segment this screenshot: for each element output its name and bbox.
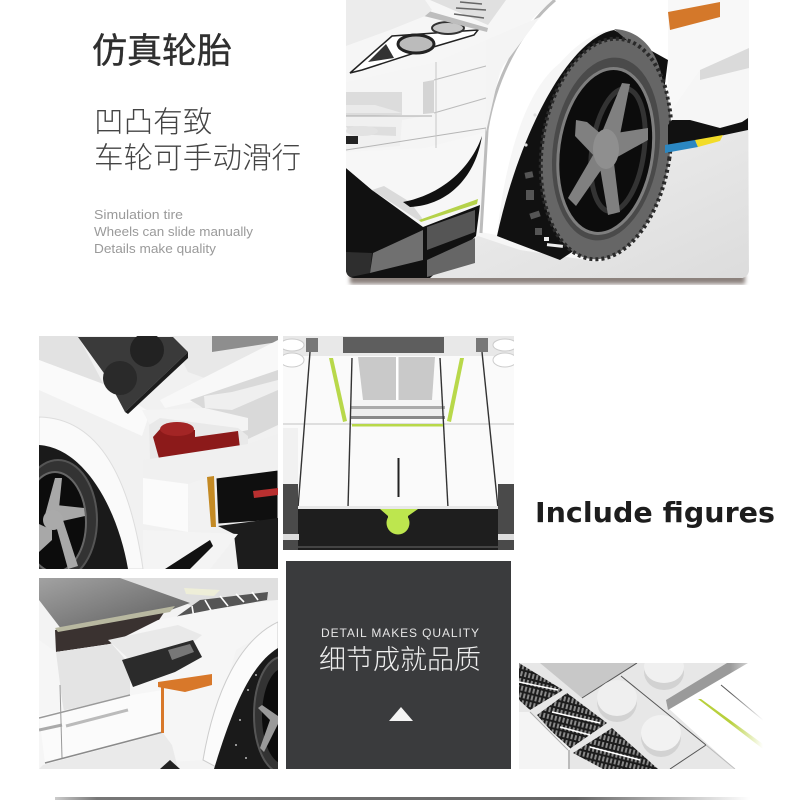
wheel arch and wheel bbox=[39, 417, 143, 569]
sub-heading: bumpy tire, wheels slide by hand: 凹凸有致 bbox=[94, 106, 212, 139]
tire and rim bbox=[538, 36, 673, 262]
English caption bbox=[94, 207, 254, 256]
louvers bbox=[177, 592, 268, 616]
white nose blocks bbox=[346, 40, 486, 152]
black mirror bbox=[122, 640, 202, 687]
sub-heading: bumpy tire, wheels slide by hand: 车轮可手动滑行 bbox=[94, 142, 301, 175]
panel: rear hood photo bbox=[280, 336, 517, 550]
English caption: Details make quality bbox=[94, 241, 217, 256]
hood lines bbox=[298, 352, 498, 508]
red tail light bbox=[153, 422, 240, 462]
headlamp bbox=[350, 30, 478, 73]
panel: side mirror photo bbox=[39, 578, 278, 769]
panel: tire photo bbox=[346, 0, 749, 284]
panel: carbon fibre detail photo bbox=[519, 663, 762, 769]
English tagline: DETAIL MAKES QUALITY bbox=[321, 626, 479, 640]
label: include figures: Include figures bbox=[535, 496, 775, 529]
heading: simulation tire: 仿真轮胎 bbox=[92, 32, 232, 71]
lime stripes bbox=[329, 358, 464, 426]
black vent bbox=[216, 470, 278, 524]
lime tab bbox=[380, 509, 418, 534]
fender flare bbox=[480, 0, 668, 235]
wheel well bbox=[497, 30, 668, 260]
hinges bbox=[306, 337, 488, 353]
bottom rule bbox=[55, 797, 750, 800]
wheel arch and wheel bbox=[203, 622, 278, 769]
orange indicator bbox=[158, 674, 212, 733]
Chinese tagline: 细节成就品质 bbox=[319, 645, 481, 675]
triangle icon bbox=[389, 707, 413, 721]
panel: detail makes quality bbox=[286, 561, 511, 769]
front bumper black bbox=[346, 168, 480, 278]
studs bbox=[597, 663, 684, 757]
panel: rear light photo bbox=[39, 336, 278, 569]
sub-heading: bumpy tire, wheels slide by hand bbox=[94, 106, 301, 175]
door side and skirt bbox=[668, 90, 672, 110]
carbon triangles bbox=[519, 663, 658, 769]
English caption: Simulation tire bbox=[94, 207, 183, 222]
English caption: Wheels can slide manually bbox=[94, 224, 254, 239]
